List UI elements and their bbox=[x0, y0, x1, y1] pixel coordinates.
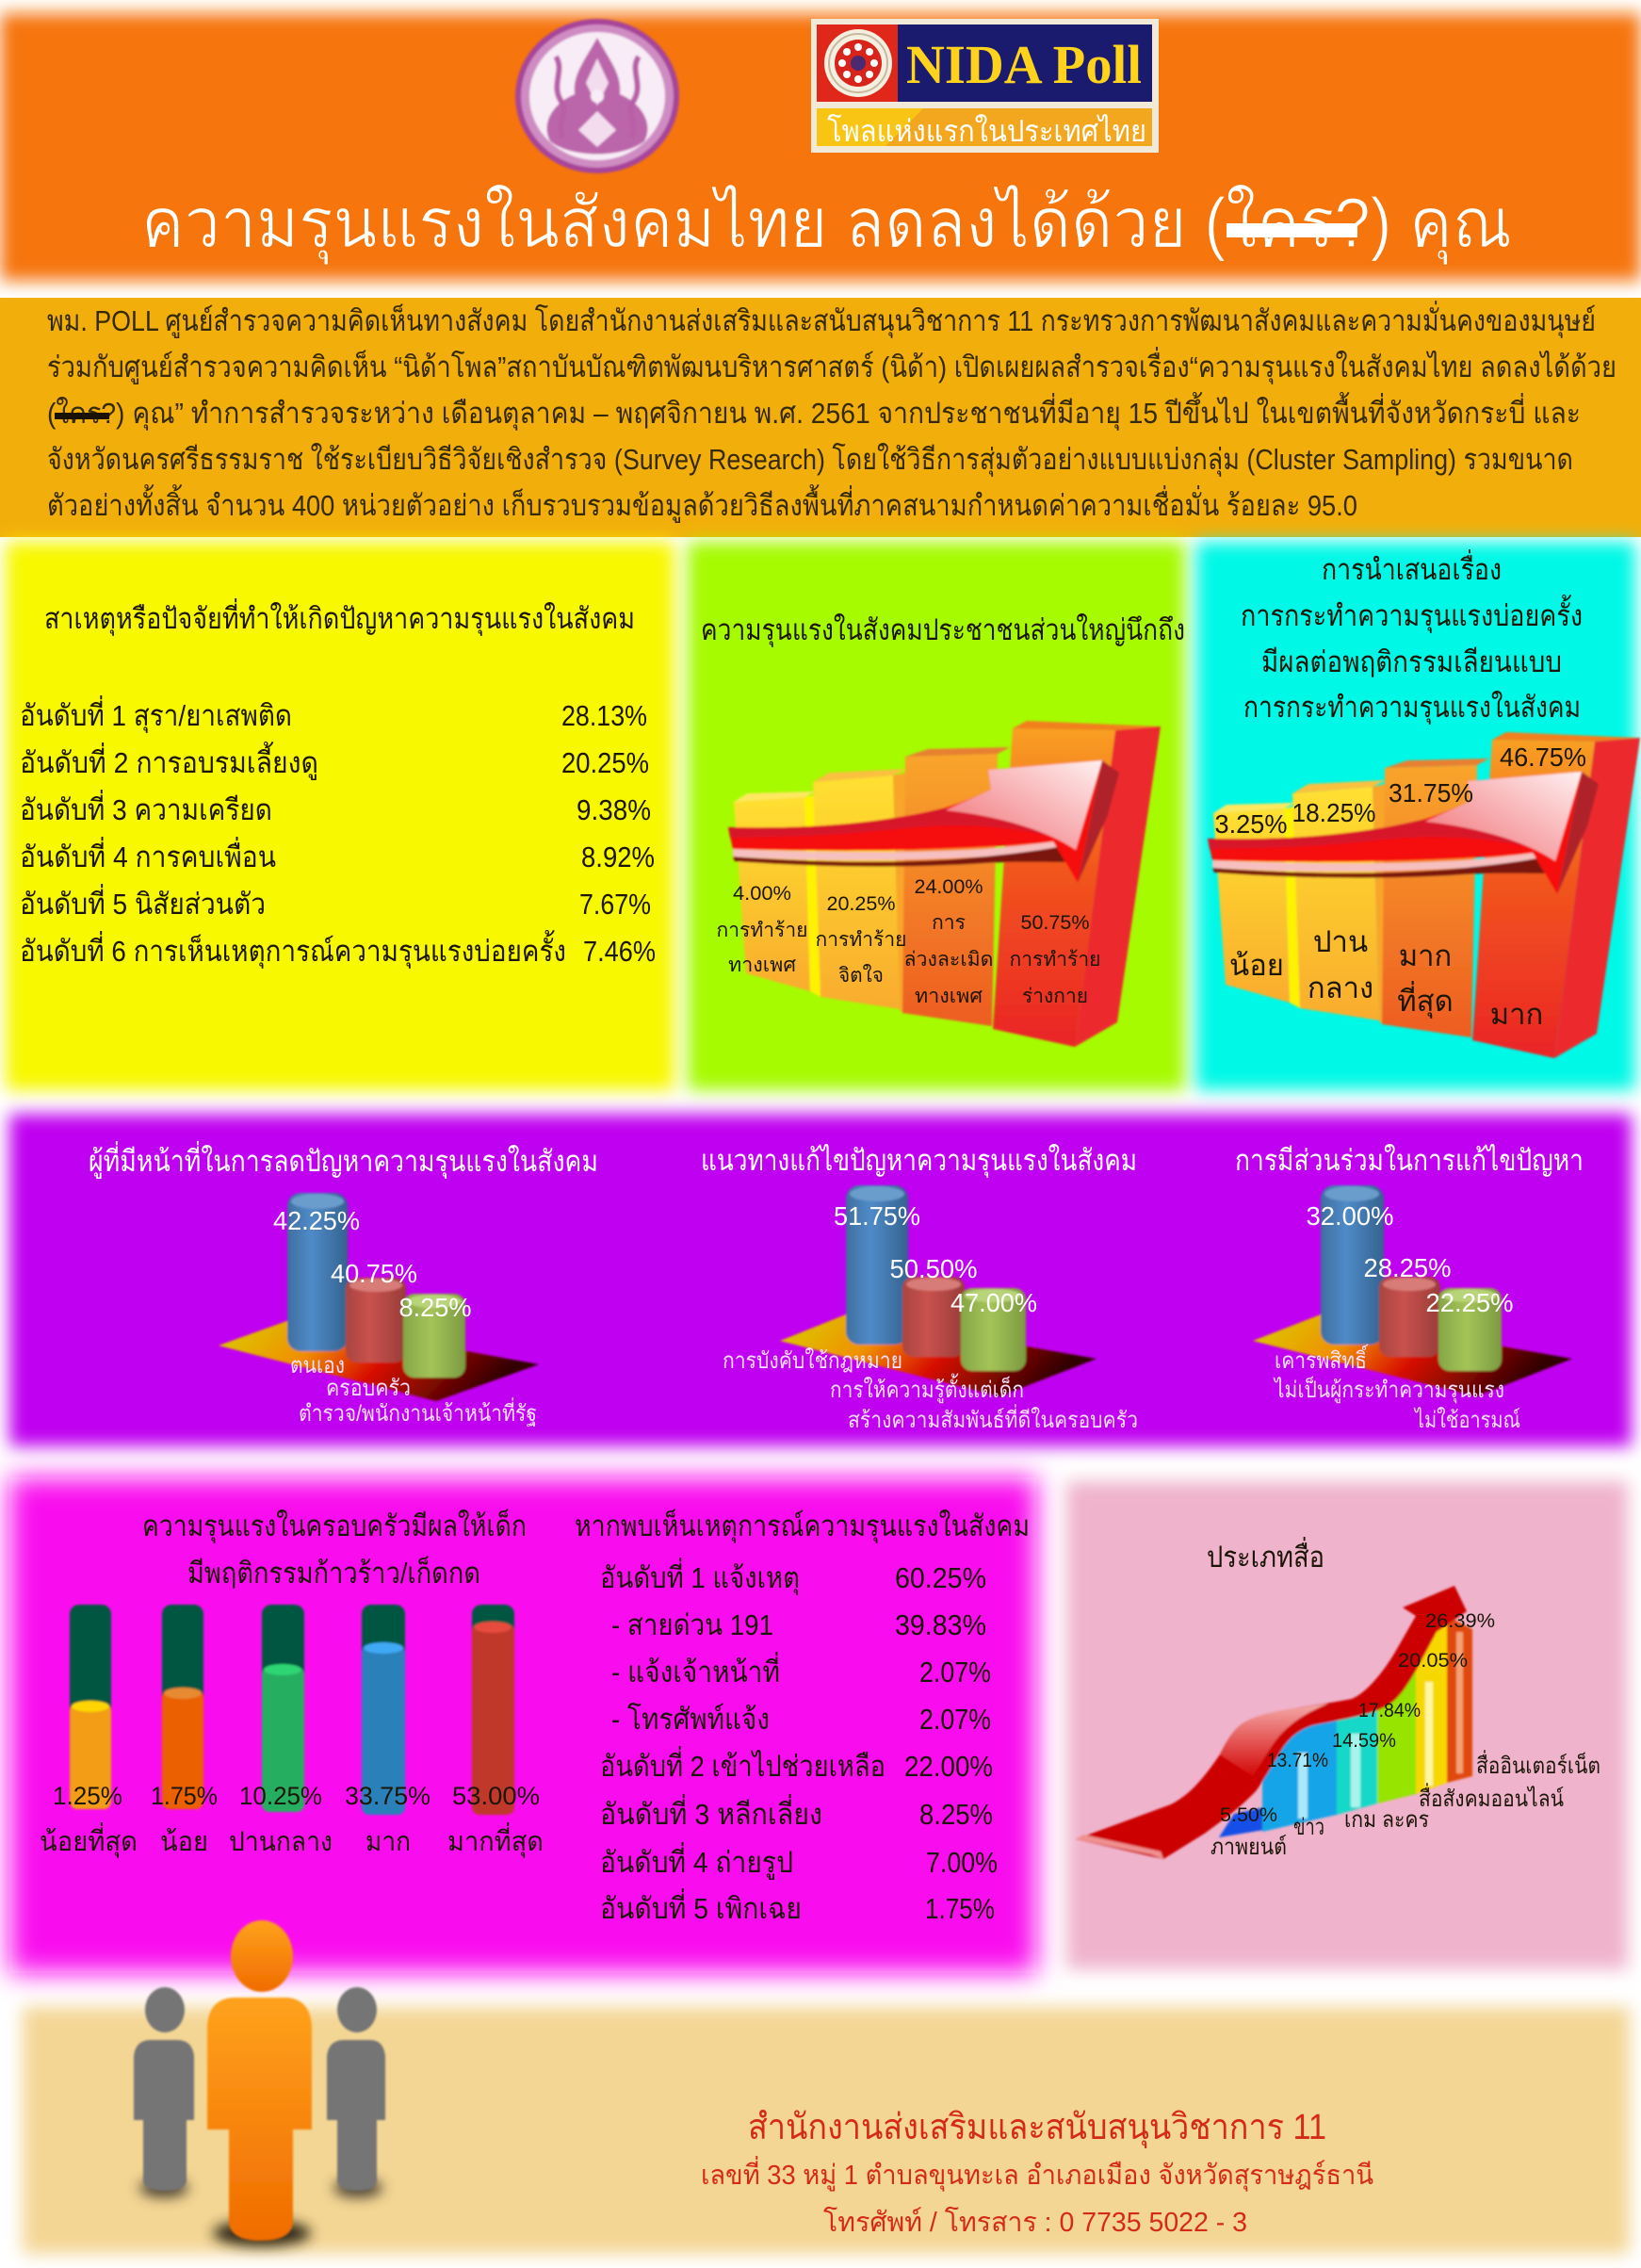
chart values: 46.75% bbox=[1500, 742, 1586, 772]
chart values: 18.25% bbox=[1292, 798, 1375, 827]
logo tagline: โพลแห่งแรกในประเทศไทย bbox=[827, 114, 1146, 148]
response ranking list: 60.25% bbox=[895, 1561, 986, 1594]
response ranking list: 2.07% bbox=[919, 1703, 991, 1736]
chart: cylinder levels: ปานกลาง bbox=[229, 1827, 333, 1857]
panel: types of violence bbox=[688, 542, 1185, 1090]
response ranking list: อันดับที่ 4 ถ่ายรูป bbox=[600, 1842, 793, 1880]
logo wordmark: NIDA Poll bbox=[906, 34, 1142, 95]
bar label: sexual abuse 4.00%: ทางเพศ bbox=[728, 955, 797, 976]
panel: family violence and responses bbox=[9, 1477, 1036, 1973]
chart: solutions: 47.00% bbox=[950, 1288, 1037, 1317]
chart category labels: ที่สุด bbox=[1397, 981, 1454, 1020]
chart: rising colored bars with arrow: 20.05% bbox=[1398, 1650, 1468, 1672]
panel: footer contact bbox=[23, 2007, 1630, 2254]
bar label: sexual harassment 24.00%: ล่วงละเมิด bbox=[904, 949, 993, 971]
figure: center orange person bbox=[207, 1920, 312, 2241]
figure: right gray person bbox=[327, 1987, 385, 2191]
chart: participation: 32.00% bbox=[1306, 1201, 1394, 1231]
chart category labels: ปาน bbox=[1313, 925, 1368, 958]
causes ranking list: 7.46% bbox=[583, 935, 656, 968]
chart: rising colored bars with arrow: สื่อสังคมออนไลน์ bbox=[1419, 1783, 1564, 1812]
chart: rising colored bars with arrow: 5.50% bbox=[1220, 1804, 1277, 1826]
logo: ministry seal bbox=[515, 19, 679, 173]
causes ranking list: 8.92% bbox=[581, 840, 655, 873]
chart: who is responsible: 40.75% bbox=[331, 1259, 417, 1288]
response ranking list: 39.83% bbox=[895, 1608, 986, 1641]
chart category labels bbox=[1229, 925, 1543, 1031]
imitation heading: มีผลต่อพฤติกรรมเลียนแบบ bbox=[1261, 645, 1562, 678]
bar label: sexual harassment 24.00% bbox=[904, 876, 993, 1007]
causes ranking list: อันดับที่ 5 นิสัยส่วนตัว bbox=[20, 884, 266, 921]
heading: solutions: แนวทางแก้ไขปัญหาความรุนแรงในสังคม bbox=[701, 1144, 1137, 1179]
chart: cylinder levels: น้อย bbox=[160, 1827, 208, 1857]
response ranking list: - โทรศัพท์แจ้ง bbox=[611, 1703, 770, 1736]
chart: participation bbox=[1253, 1185, 1572, 1433]
title: ความรุนแรงในสังคมไทย ลดลงได้ด้วย (ใคร?) คุณ bbox=[141, 184, 1512, 266]
bar label: sexual harassment 24.00%: การ bbox=[932, 912, 966, 934]
chart values: 3.25% bbox=[1215, 809, 1287, 839]
icon: three people bbox=[134, 1920, 385, 2246]
chart: cylinder levels: 1.25% bbox=[53, 1782, 122, 1810]
chart: participation: 22.25% bbox=[1426, 1288, 1513, 1317]
imitation heading bbox=[1241, 549, 1583, 726]
bar label: physical abuse 50.75%: ร่างกาย bbox=[1022, 986, 1088, 1007]
chart: who is responsible: 8.25% bbox=[399, 1293, 471, 1322]
chart: rising colored bars with arrow: สื่ออินเตอร์เน็ต bbox=[1476, 1750, 1600, 1779]
intro text bbox=[47, 301, 1617, 523]
panel: media types bbox=[1066, 1481, 1628, 1969]
chart: participation: เคารพสิทธิ์ bbox=[1275, 1344, 1369, 1374]
imitation heading: การกระทำความรุนแรงบ่อยครั้ง bbox=[1241, 595, 1583, 634]
chart: cylinder levels: 10.25% bbox=[239, 1782, 322, 1810]
response ranking list: 2.07% bbox=[919, 1656, 991, 1689]
heading: participation: การมีส่วนร่วมในการแก้ไขปัญหา bbox=[1235, 1144, 1584, 1177]
causes ranking list bbox=[20, 695, 656, 970]
causes ranking list: อันดับที่ 3 ความเครียด bbox=[20, 790, 272, 826]
response ranking list: - สายด่วน 191 bbox=[611, 1608, 773, 1641]
heading: family violence: มีพฤติกรรมก้าวร้าว/เก็ดกด bbox=[187, 1556, 480, 1590]
panel: introduction bbox=[0, 298, 1641, 537]
response ranking list: 22.00% bbox=[904, 1750, 993, 1783]
causes ranking list: 9.38% bbox=[577, 793, 651, 826]
causes heading: สาเหตุหรือปัจจัยที่ทำให้เกิดปัญหาความรุนแรงในสังคม bbox=[44, 598, 635, 637]
causes ranking list: อันดับที่ 2 การอบรมเลี้ยงดู bbox=[20, 742, 318, 780]
footer text: สำนักงานส่งเสริมและสนับสนุนวิชาการ 11 bbox=[748, 2108, 1326, 2148]
chart: solutions: การให้ความรู้ตั้งแต่เด็ก bbox=[830, 1373, 1024, 1404]
chart: rising colored bars with arrow: 13.71% bbox=[1267, 1750, 1328, 1771]
intro text: ตัวอย่างทั้งสิ้น จำนวน 400 หน่วยตัวอย่าง เก็บรวบรวมข้อมูลด้วยวิธีลงพื้นที่ภาคสนามกำหนดค่าความเชื่อมั่น ร้อยละ 95.0 bbox=[47, 484, 1357, 523]
chart values: 31.75% bbox=[1389, 778, 1473, 808]
chart values bbox=[1215, 742, 1586, 839]
heading: family violence: ความรุนแรงในครอบครัวมีผลให้เด็ก bbox=[142, 1509, 527, 1544]
causes ranking list: อันดับที่ 1 สุรา/ยาเสพติด bbox=[20, 695, 292, 734]
chart: solutions: สร้างความสัมพันธ์ที่ดีในครอบครัว bbox=[848, 1404, 1138, 1433]
causes ranking list: 28.13% bbox=[561, 699, 647, 732]
response ranking list: 1.75% bbox=[925, 1892, 995, 1925]
chart: cylinder levels: มาก bbox=[366, 1827, 411, 1857]
panel: causes of violence bbox=[6, 542, 674, 1090]
chart: solutions: 51.75% bbox=[834, 1201, 920, 1231]
chart: rising colored bars with arrow: 26.39% bbox=[1425, 1610, 1495, 1632]
chart: cylinder levels: มากที่สุด bbox=[447, 1822, 544, 1858]
response ranking list: อันดับที่ 5 เพิกเฉย bbox=[600, 1888, 802, 1925]
bar label: sexual harassment 24.00%: 24.00% bbox=[914, 876, 983, 898]
chart category labels: น้อย bbox=[1229, 949, 1284, 982]
bar label: physical abuse 50.75%: การทำร้าย bbox=[1010, 949, 1100, 971]
chart: rising colored bars with arrow: เกม ละคร bbox=[1344, 1807, 1429, 1833]
causes ranking list: 7.67% bbox=[579, 888, 651, 921]
chart: cylinder levels: 33.75% bbox=[345, 1782, 431, 1810]
bar label: physical abuse 50.75%: 50.75% bbox=[1021, 912, 1089, 934]
bar label: physical abuse 50.75% bbox=[1010, 912, 1100, 1007]
response ranking list: - แจ้งเจ้าหน้าที่ bbox=[611, 1652, 780, 1689]
response ranking list: 8.25% bbox=[919, 1798, 993, 1831]
chart category labels: มาก bbox=[1490, 998, 1543, 1031]
chart category labels: มาก bbox=[1399, 939, 1452, 972]
response ranking list: อันดับที่ 1 แจ้งเหตุ bbox=[600, 1558, 800, 1596]
bar label: mental abuse 20.25%: จิตใจ bbox=[838, 964, 884, 987]
heading: who is responsible: ผู้ที่มีหน้าที่ในการลดปัญหาความรุนแรงในสังคม bbox=[89, 1141, 598, 1180]
chart: rising colored bars with arrow: 17.84% bbox=[1358, 1700, 1421, 1721]
chart: cylinder levels: 1.75% bbox=[151, 1782, 218, 1810]
types heading: ความรุนแรงในสังคมประชาชนส่วนใหญ่นึกถึง bbox=[701, 613, 1185, 648]
chart: rising bars with arrow bbox=[1208, 732, 1640, 1058]
bar label: sexual abuse 4.00%: การทำร้าย bbox=[716, 920, 808, 941]
footer text: เลขที่ 33 หมู่ 1 ตำบลขุนทะเล อำเภอเมือง จังหวัดสุราษฎร์ธานี bbox=[701, 2156, 1373, 2192]
panel: header bbox=[0, 13, 1641, 281]
bar label: mental abuse 20.25% bbox=[816, 893, 906, 987]
chart: rising colored bars with arrow: 14.59% bbox=[1332, 1730, 1396, 1752]
chart: solutions bbox=[723, 1185, 1138, 1433]
bar label: sexual harassment 24.00%: ทางเพศ bbox=[915, 986, 983, 1007]
panel: media imitation bbox=[1196, 542, 1640, 1090]
causes ranking list: 20.25% bbox=[561, 746, 649, 779]
chart: participation: 28.25% bbox=[1364, 1253, 1451, 1282]
footer text: โทรศัพท์ / โทรสาร : 0 7735 5022 - 3 bbox=[823, 2206, 1247, 2238]
chart: cylinder levels bbox=[40, 1605, 544, 1858]
heading: family violence bbox=[142, 1509, 527, 1590]
response ranking list: อันดับที่ 3 หลีกเลี่ยง bbox=[600, 1794, 822, 1831]
causes ranking list: อันดับที่ 6 การเห็นเหตุการณ์ความรุนแรงบ่อยครั้ง bbox=[20, 930, 566, 970]
chart: rising bars with arrow bbox=[716, 721, 1161, 1047]
bar label: sexual abuse 4.00% bbox=[716, 883, 808, 976]
causes ranking list: อันดับที่ 4 การคบเพื่อน bbox=[20, 837, 276, 873]
chart: who is responsible bbox=[219, 1193, 539, 1427]
chart: who is responsible: ตนเอง bbox=[290, 1353, 345, 1379]
bar label: mental abuse 20.25%: 20.25% bbox=[827, 893, 895, 915]
chart: participation: ไม่ใช้อารมณ์ bbox=[1413, 1407, 1520, 1433]
chart: rising colored bars with arrow: ภาพยนต์ bbox=[1210, 1834, 1287, 1860]
chart: who is responsible: 42.25% bbox=[273, 1206, 360, 1235]
chart: rising colored bars with arrow bbox=[1076, 1586, 1600, 1860]
chart: who is responsible: ตำรวจ/พนักงานเจ้าหน้าที่รัฐ bbox=[299, 1397, 537, 1427]
heading: media types: ประเภทสื่อ bbox=[1207, 1537, 1324, 1574]
imitation heading: การกระทำความรุนแรงในสังคม bbox=[1243, 691, 1581, 726]
chart: participation: ไม่เป็นผู้กระทำความรุนแรง bbox=[1273, 1376, 1504, 1404]
response ranking list: 7.00% bbox=[926, 1846, 998, 1879]
bar label: mental abuse 20.25%: การทำร้าย bbox=[816, 929, 906, 951]
figure: left gray person bbox=[134, 1987, 194, 2191]
chart category labels: กลาง bbox=[1308, 971, 1373, 1004]
chart: who is responsible: ครอบครัว bbox=[326, 1376, 411, 1401]
chart: rising colored bars with arrow: ข่าว bbox=[1293, 1815, 1324, 1840]
heading: witnessing violence: หากพบเห็นเหตุการณ์ความรุนแรงในสังคม bbox=[575, 1509, 1030, 1544]
footer text bbox=[701, 2108, 1373, 2238]
chart: cylinder levels: 53.00% bbox=[452, 1782, 540, 1810]
response ranking list: อันดับที่ 2 เข้าไปช่วยเหลือ bbox=[600, 1746, 885, 1783]
chart: solutions: 50.50% bbox=[889, 1254, 978, 1283]
bar label: sexual abuse 4.00%: 4.00% bbox=[733, 883, 791, 905]
imitation heading: การนำเสนอเรื่อง bbox=[1322, 549, 1502, 586]
chart: solutions: การบังคับใช้กฎหมาย bbox=[723, 1347, 902, 1374]
chart: cylinder levels: น้อยที่สุด bbox=[40, 1822, 138, 1858]
response ranking list bbox=[600, 1558, 998, 1925]
logo: NIDA Poll bbox=[811, 19, 1159, 153]
panel: responsibility and solutions bbox=[9, 1114, 1632, 1446]
